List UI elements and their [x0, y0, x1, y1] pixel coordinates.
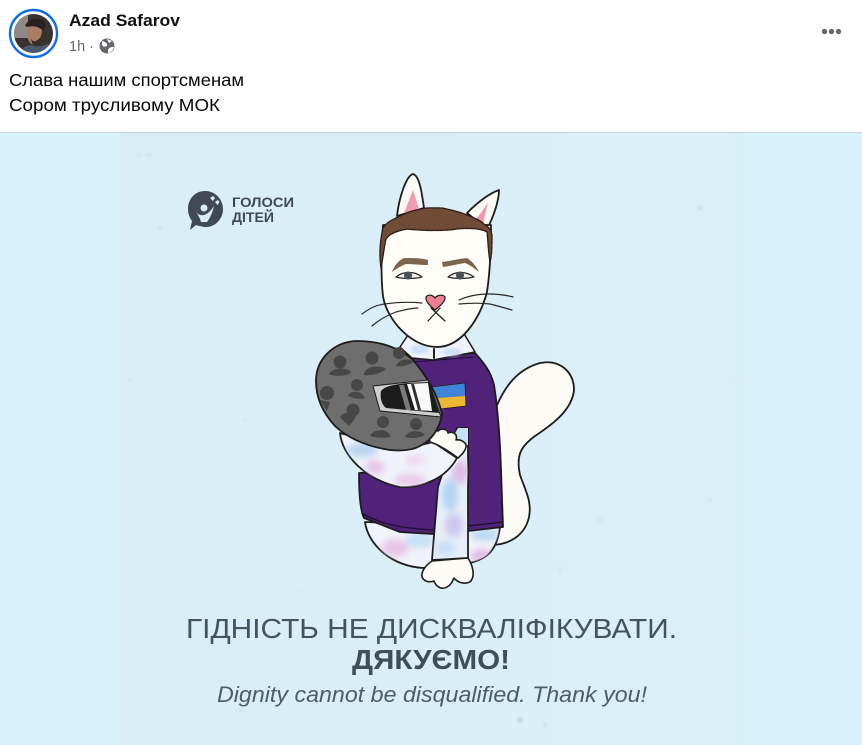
logo wordmark: [232, 194, 294, 225]
english caption: Dignity cannot be disqualified. Thank you!: [217, 682, 647, 707]
cat illustration: [316, 174, 574, 588]
post text: [9, 70, 244, 115]
thanks heading: ДЯКУЄМО!: [352, 644, 510, 675]
logo wordmark: ДІТЕЙ: [232, 208, 274, 225]
shirt collar: [400, 332, 475, 360]
cat ears: [397, 174, 499, 229]
logo speech bubble icon: [188, 191, 223, 230]
eyes: [396, 272, 474, 280]
logo wordmark: ГОЛОСИ: [232, 194, 294, 210]
whiskers: [362, 294, 513, 326]
vertical sleeve: [432, 428, 468, 560]
helmet silhouettes: [320, 347, 425, 438]
lower paw: [422, 558, 473, 588]
author name: Azad Safarov: [69, 11, 181, 30]
icon: more menu: [822, 29, 841, 34]
upper paw: [429, 429, 466, 458]
post header background: [0, 0, 862, 132]
post text: Сором трусливому МОК: [9, 95, 221, 115]
helmet visor: [373, 380, 441, 417]
fencing helmet: [316, 341, 442, 451]
hair: [380, 208, 492, 268]
logo: Голоси Дітей: [188, 191, 294, 230]
eyebrows: [392, 258, 479, 272]
icon: globe: [100, 38, 114, 54]
cat face: [382, 225, 491, 347]
headline: ГІДНІСТЬ НЕ ДИСКВАЛІФІКУВАТИ.: [186, 613, 677, 644]
nose and mouth: [426, 295, 445, 321]
post text: Слава нашим спортсменам: [9, 70, 244, 90]
timestamp: 1h ·: [69, 39, 94, 55]
cat tail: [490, 362, 574, 545]
cat lower body: [365, 522, 500, 568]
purple vest: [359, 353, 503, 534]
upper sleeve: [340, 433, 457, 487]
avatar: [10, 10, 57, 57]
flag patch: [431, 383, 466, 409]
